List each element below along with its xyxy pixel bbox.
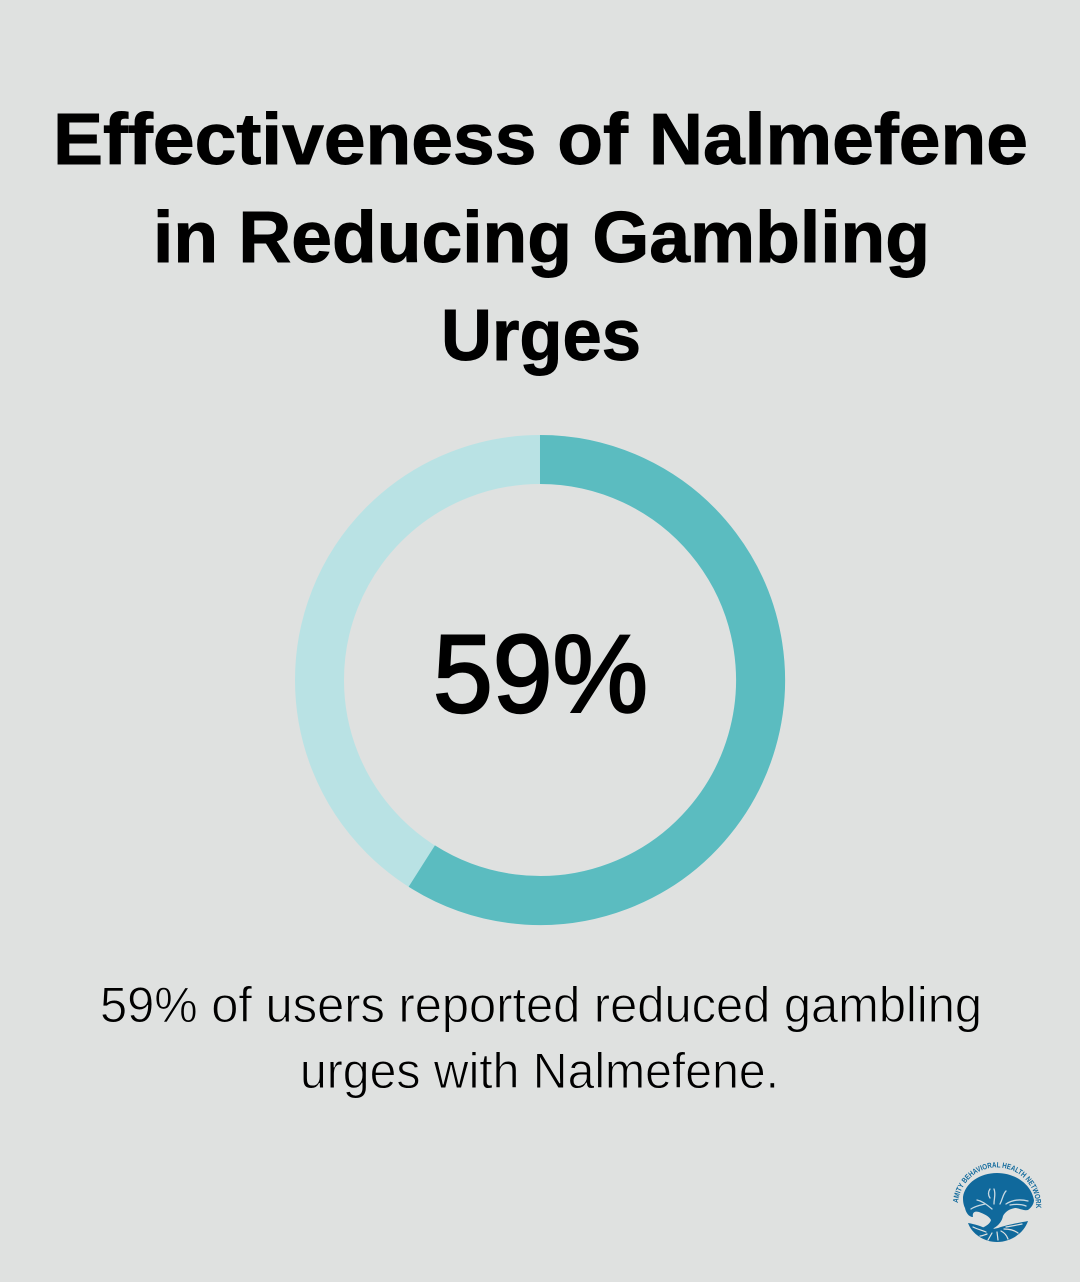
title bbox=[53, 100, 1028, 376]
logo roots bbox=[968, 1221, 1028, 1242]
description text: 59% of users reported reduced gambling bbox=[100, 977, 982, 1033]
logo root highlights bbox=[973, 1224, 1022, 1240]
title: Effectiveness of Nalmefene bbox=[53, 100, 1028, 180]
logo text: AMITY BEHAVIORAL HEALTH NETWORK bbox=[953, 1162, 1042, 1208]
logo tree canopy and trunk bbox=[963, 1173, 1034, 1234]
title: Urges bbox=[441, 296, 641, 376]
logo tree branches bbox=[971, 1189, 1028, 1209]
logo: Amity Behavioral Health Network bbox=[953, 1162, 1042, 1242]
description text: urges with Nalmefene. bbox=[300, 1043, 779, 1099]
description text bbox=[100, 977, 982, 1099]
donut value: 59% bbox=[433, 613, 648, 736]
donut chart: 59% bbox=[320, 460, 761, 900]
title: in Reducing Gambling bbox=[153, 198, 930, 278]
